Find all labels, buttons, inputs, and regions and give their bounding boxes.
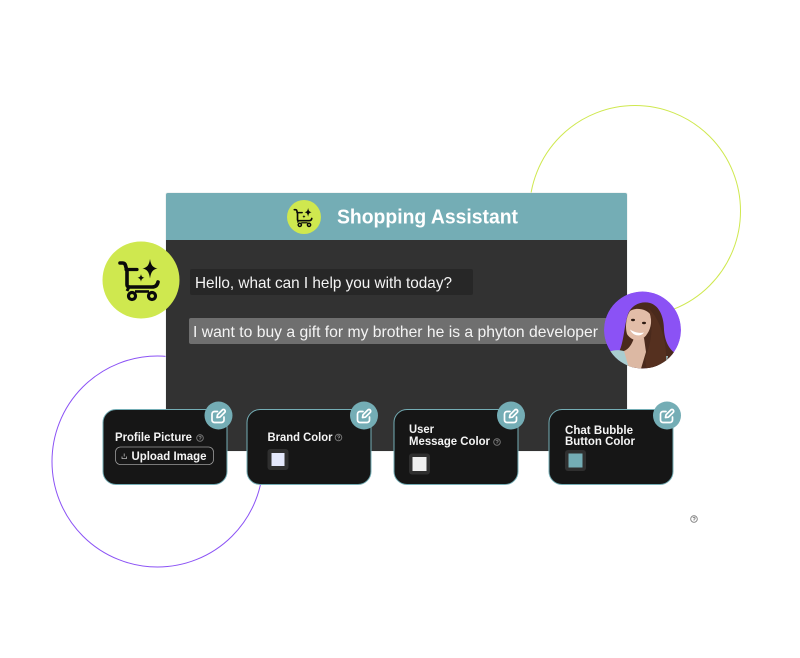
icon: edit button [497, 402, 525, 430]
avatar: woman portrait [604, 292, 681, 372]
assistant message bubble: Hello, what can I help you with today? [195, 275, 452, 292]
label: User Message Color [409, 424, 491, 448]
panel: chat window [166, 192, 628, 452]
icon: stray help marker [691, 516, 697, 522]
label: Chat Bubble Button Color: Button Color [565, 436, 636, 448]
chat window header [166, 193, 627, 240]
label: Chat Bubble Button Color [565, 425, 636, 448]
swatch: brand colour [268, 449, 288, 470]
icon: header cart badge [287, 200, 321, 234]
label: User Message Color: Message Color [409, 436, 491, 448]
icon: large shopping cart badge [102, 242, 180, 318]
icon: edit button [204, 402, 232, 430]
icon: edit button [653, 402, 681, 430]
button: Upload Image: Upload Image [132, 451, 206, 463]
card: Profile Picture [103, 402, 232, 484]
label: User Message Color: User [409, 424, 435, 436]
label: Brand Color: Brand Color [268, 432, 333, 444]
card: Chat Bubble Button Color [549, 402, 681, 484]
label: Chat Bubble Button Color: Chat Bubble [565, 425, 633, 437]
icon: help [197, 435, 203, 441]
icon: help [494, 439, 500, 445]
icon: edit button [350, 402, 378, 430]
heading: Shopping Assistant: Shopping Assistant [337, 206, 518, 228]
swatch: user message colour [409, 454, 430, 474]
card: User Message Color [394, 402, 525, 484]
decorative circle: lime outline [530, 106, 740, 316]
infographic canvas [52, 105, 741, 568]
decorative circle: purple outline [52, 356, 263, 567]
user message bubble: I want to buy a gift for my brother he is a phyton developer [193, 324, 599, 341]
card: Brand Color [247, 402, 378, 484]
icon: help [335, 434, 342, 441]
swatch: chat bubble colour [565, 450, 586, 471]
user message bubble [189, 318, 614, 344]
label: Profile Picture: Profile Picture [115, 432, 192, 444]
assistant message bubble [190, 269, 473, 295]
